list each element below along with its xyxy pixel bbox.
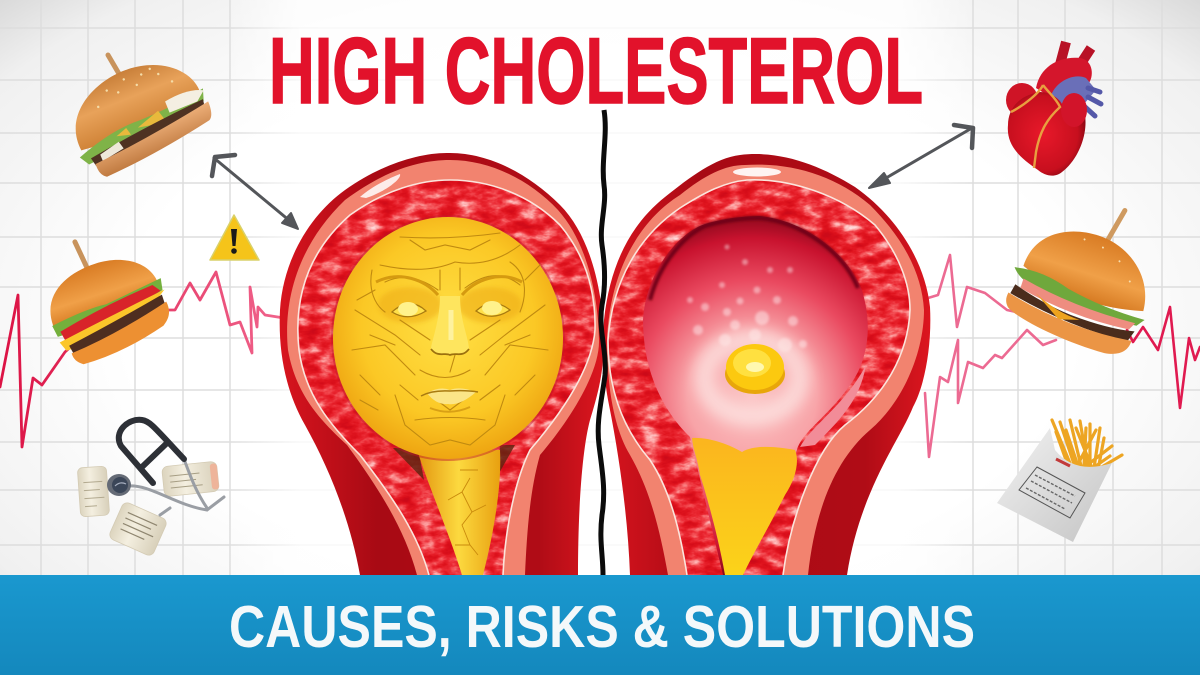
brow ridges [376, 277, 522, 295]
small yellow plaque [725, 344, 785, 394]
stethoscope tubing [119, 420, 184, 483]
warning triangle icon [210, 215, 259, 260]
vena cava blue vessels [1050, 76, 1101, 116]
salmon band [287, 160, 599, 575]
shadow behind face and neck [393, 445, 515, 480]
metal tubes [128, 459, 224, 515]
pill bottle left [77, 466, 110, 517]
artery outer wall [280, 153, 604, 575]
ECG line left [0, 272, 284, 447]
right atrium lobe [1061, 93, 1087, 127]
pill bottle right [162, 461, 219, 497]
yellow deposit below [692, 438, 797, 575]
icon: burger middle left [30, 220, 179, 370]
yellow neck [417, 450, 500, 575]
dark upper lumen rim [650, 218, 858, 300]
eye socket shading [378, 287, 442, 323]
artery lumen [643, 216, 868, 575]
icon: heart [1006, 42, 1101, 176]
outer highlight [360, 174, 400, 198]
ECG lines right [925, 255, 1200, 457]
arrow: open artery to heart [869, 125, 973, 188]
face wrinkles [352, 233, 548, 445]
right eye [476, 301, 510, 316]
left atrium lobe [1006, 83, 1038, 117]
bottom banner [0, 575, 1200, 675]
icon: burger right [998, 183, 1175, 362]
aortic arch [1036, 58, 1092, 100]
speckled lumen surface [687, 244, 807, 352]
marbled artery wall [298, 180, 595, 575]
marbled artery wall [608, 180, 910, 575]
bag body [997, 428, 1112, 542]
coronary vessels [1011, 85, 1060, 168]
icon: fries bag [997, 420, 1122, 542]
icon: stethoscope and pill bottles [77, 420, 224, 557]
artery outer wall [603, 154, 930, 575]
aorta branches [1058, 42, 1091, 74]
right artery: partly open with small plaque [603, 154, 930, 575]
mouth [421, 388, 478, 412]
salmon band [607, 165, 924, 575]
bag label [1019, 459, 1085, 518]
pill bottle bottom [108, 501, 168, 557]
yellow face plaque [331, 215, 565, 461]
pale fold at lumen base [800, 365, 866, 447]
neck cracks [448, 470, 486, 555]
left eye [392, 302, 426, 317]
icon: burger top left [48, 27, 220, 183]
left artery: blocked by yellow plaque [280, 153, 604, 575]
fries [1052, 420, 1122, 470]
nose [431, 296, 469, 355]
centre wavy divider [598, 110, 605, 575]
outer highlight [733, 168, 781, 176]
chest piece [107, 474, 131, 496]
pale ring around plaque [704, 340, 800, 416]
arrow: burger to blocked artery [212, 155, 298, 229]
banner text: CAUSES, RISKS & SOLUTIONS [229, 594, 975, 660]
heart body [1008, 92, 1086, 176]
